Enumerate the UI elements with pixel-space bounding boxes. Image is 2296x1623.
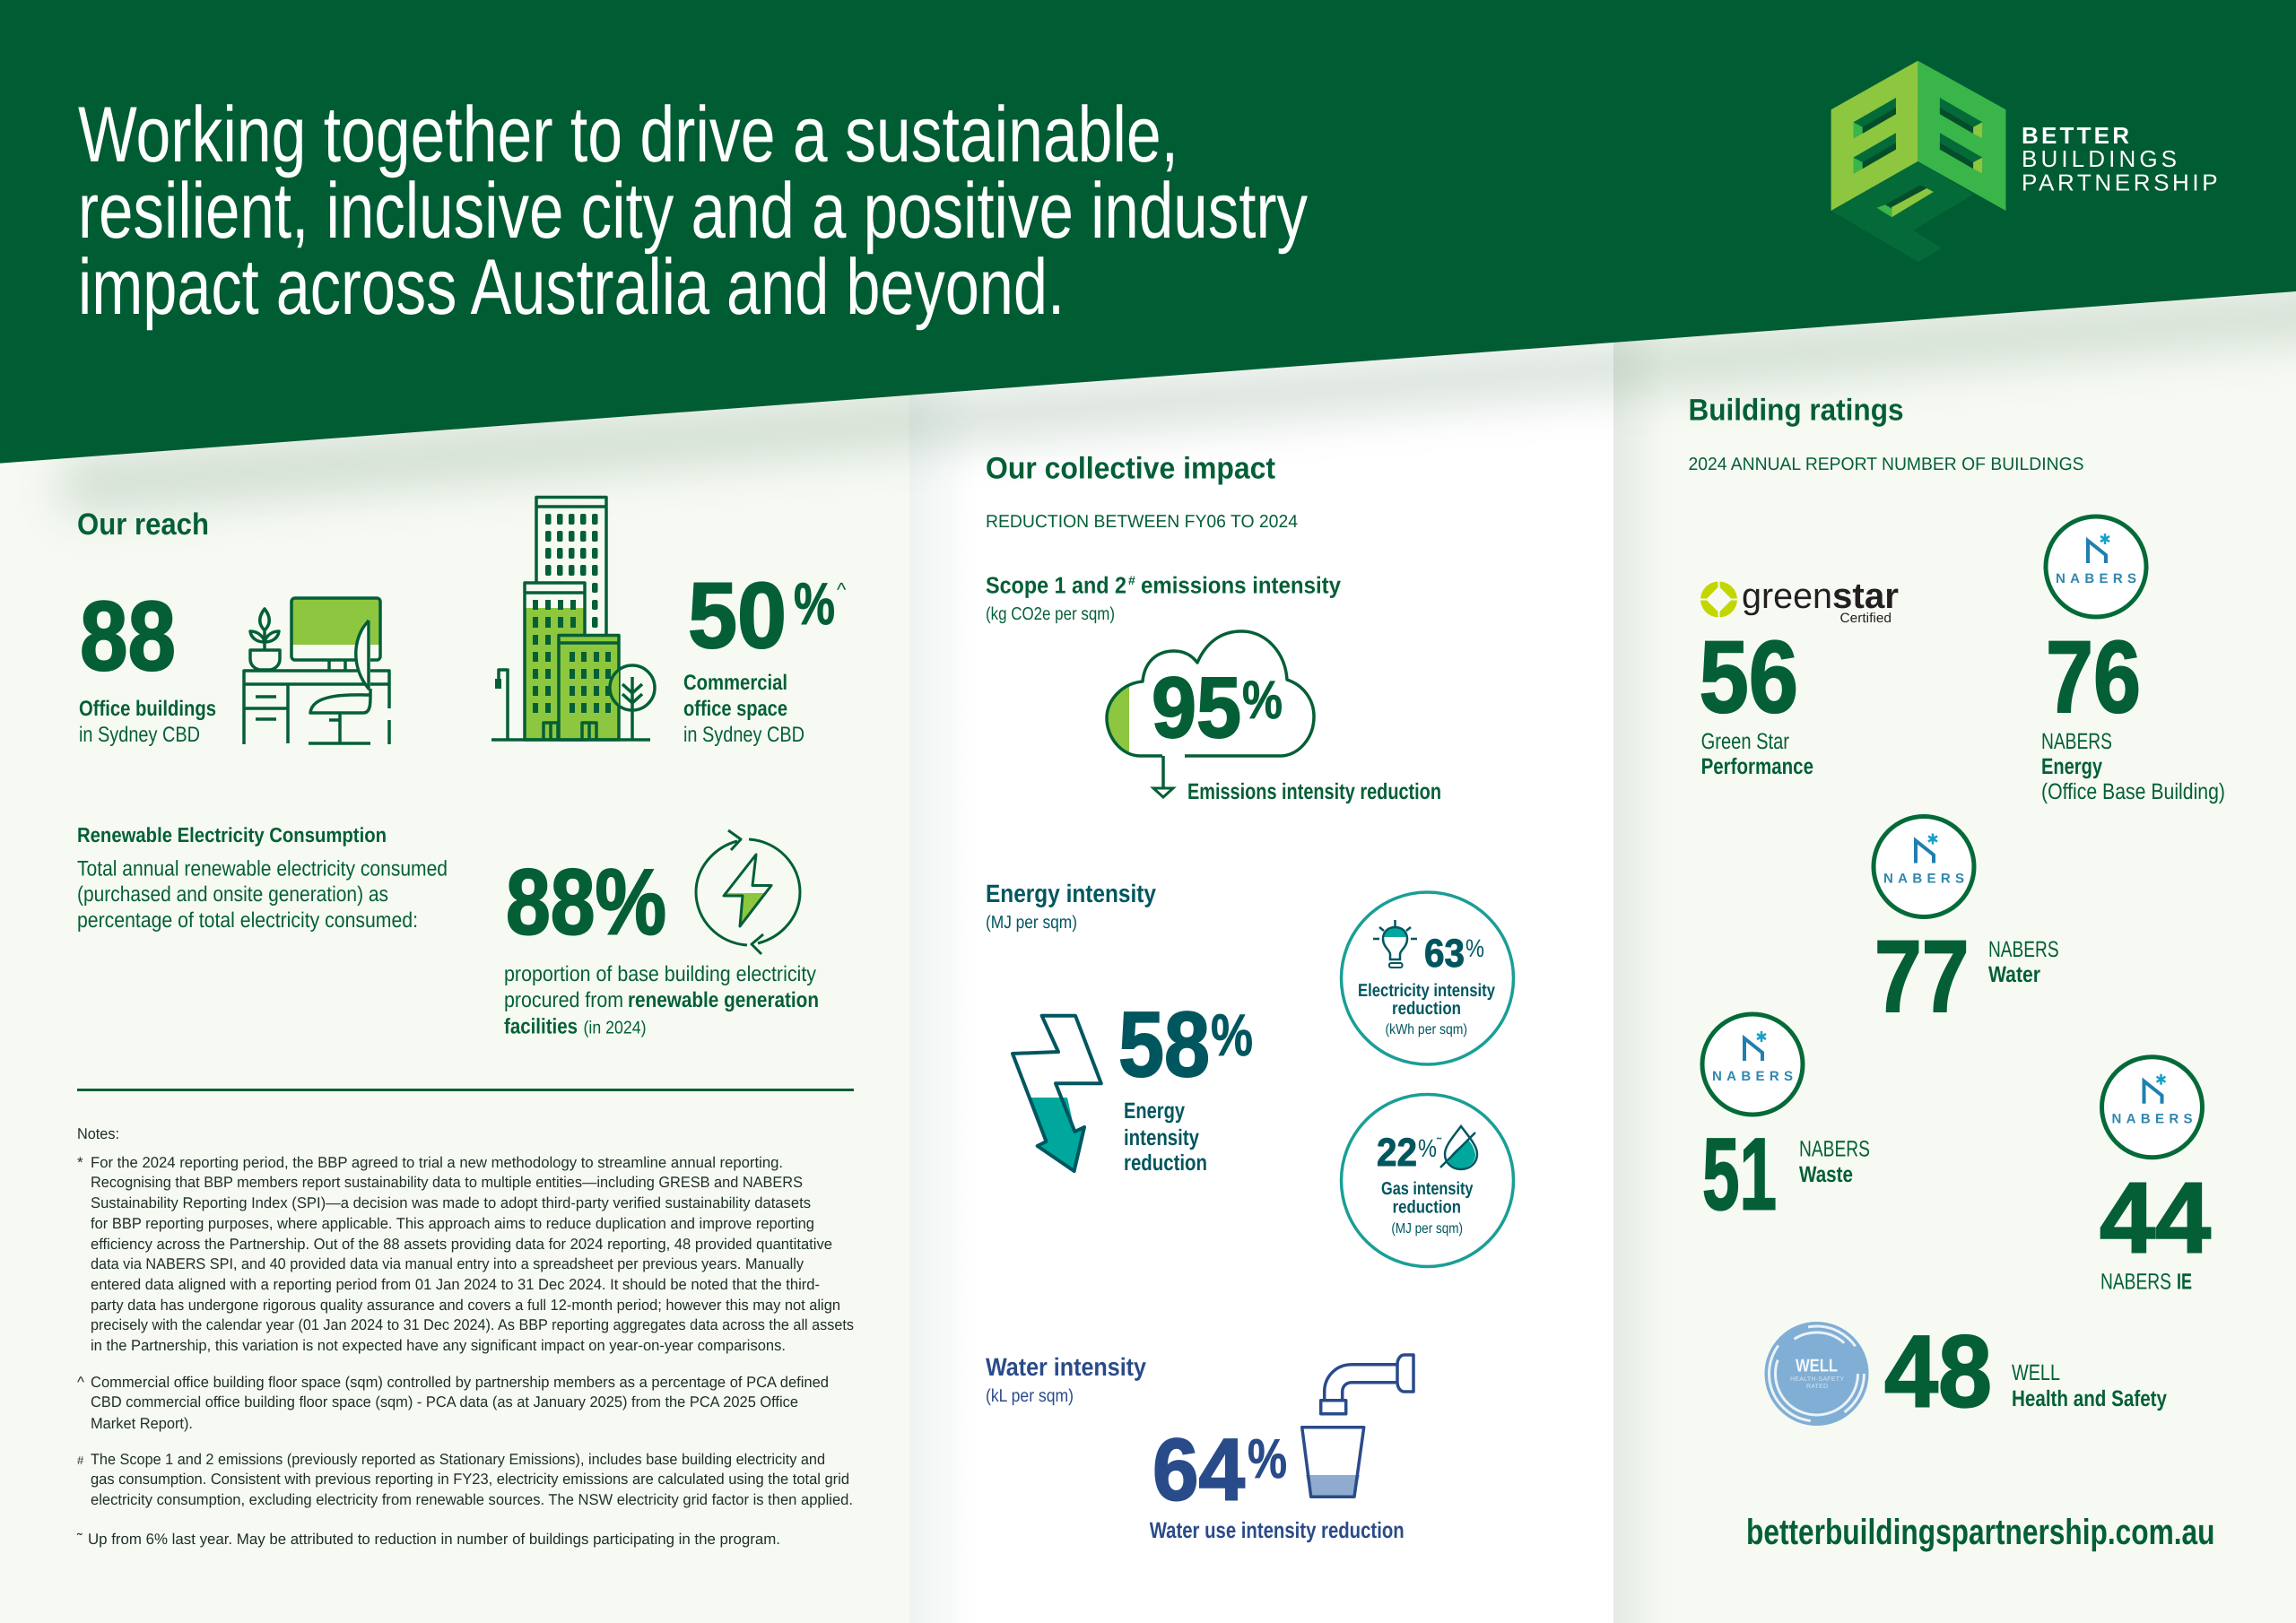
text block: renewable electricity consumption: Total annual renewable electricity consumed (77, 857, 448, 881)
notes: in the Partnership, this variation is not expected have any significant impact on year-on-year comparisons. (91, 1337, 786, 1354)
callout: electricity intensity: 63 (1424, 932, 1465, 976)
heading: energy intensity (986, 880, 1156, 933)
heading: our collective impact (986, 452, 1298, 532)
text block: proportion of renewable generation: (in 2024) (583, 1019, 646, 1038)
title: Working together to drive a sustainable, (78, 90, 1178, 178)
stat: 50% commercial office space: office space (683, 697, 787, 721)
callout: gas intensity: reduction (1393, 1198, 1461, 1218)
notes: Notes: (77, 1125, 119, 1142)
notes: Sustainability Reporting Index (SPI)—a decision was made to adopt third-party verified sustainability datasets (91, 1194, 811, 1211)
heading: scope 1 and 2 emissions: (kg CO2e per sqm) (986, 604, 1115, 624)
stat: 88 office buildings (79, 581, 216, 747)
notes: data via NABERS SPI, and 40 provided data via manual entry into a spreadsheet per previous years. Manually (91, 1255, 804, 1272)
badge: NABERS energy: NABERS (2056, 571, 2136, 586)
callout: electricity intensity (1342, 892, 1514, 1064)
notes: party data has undergone rigorous quality assurance and covers a full 12-month period; however this may not align (91, 1297, 840, 1314)
icon: light bulb (1373, 920, 1417, 968)
stat: 51 NABERS waste (1702, 1117, 1870, 1232)
text block: proportion of renewable generation (504, 962, 819, 1039)
stat: 48 WELL (1884, 1315, 2167, 1429)
callout: electricity intensity: % (1465, 934, 1484, 962)
badge: NABERS water: NABERS (1883, 872, 1964, 886)
stat: 48 WELL: 48 (1884, 1315, 1992, 1429)
logo: greenstar: Certified (1840, 611, 1892, 626)
stat: 88 office buildings: in Sydney CBD (79, 723, 200, 747)
callout: gas intensity: (MJ per sqm) (1391, 1221, 1463, 1237)
heading: Our reach: Our reach (77, 508, 209, 542)
heading: water intensity: (kL per sqm) (986, 1386, 1074, 1406)
logo: Better Buildings Partnership: PARTNERSHIP (2022, 169, 2218, 196)
icon: city buildings (491, 497, 655, 740)
text block: proportion of renewable generation: proportion of base building electricity (504, 962, 816, 986)
icon: tap and glass (1302, 1355, 1413, 1497)
notes: CBD commercial office building floor space (sqm) - PCA data (as at January 2025) from the PCA 2025 Office (91, 1393, 798, 1410)
callout: gas intensity: Gas intensity (1381, 1179, 1474, 1199)
stat: 77 NABERS water (1874, 920, 2059, 1034)
stat: 76 NABERS energy (2041, 621, 2225, 804)
stat: 58% energy: % (1211, 1002, 1253, 1068)
heading: building ratings: 2024 ANNUAL REPORT NUMBER OF BUILDINGS (1688, 455, 2084, 474)
callout: gas intensity (1342, 1094, 1514, 1266)
notes: # (77, 1454, 84, 1467)
stat: 95% emissions: 95 (1152, 660, 1241, 756)
stat: 50% commercial office space: 50 (688, 564, 787, 668)
stat: 50% commercial office space (683, 564, 847, 747)
stat: 56 green star: 56 (1699, 621, 1798, 734)
stat: 77 NABERS water: Water (1988, 962, 2040, 987)
stat: 48 WELL: WELL (2012, 1360, 2060, 1385)
text block: proportion of renewable generation: renewable generation (628, 988, 819, 1012)
text block: proportion of renewable generation: facilities (504, 1015, 578, 1039)
badge: NABERS energy (2046, 516, 2146, 617)
stat: 88 office buildings: 88 (80, 581, 176, 691)
heading: our collective impact: REDUCTION BETWEEN FY06 TO 2024 (986, 512, 1298, 532)
notes: precisely with the calendar year (01 Jan 2024 to 31 Dec 2024). As BBP reporting aggregates data across the all assets (91, 1316, 854, 1333)
callout: electricity intensity: Electricity intensity (1358, 981, 1496, 1001)
stat: 50% commercial office space: ^ (837, 578, 847, 601)
notes: The Scope 1 and 2 emissions (previously reported as Stationary Emissions), includes base building electricity and (91, 1451, 825, 1468)
heading: water intensity (986, 1353, 1146, 1406)
icon: office desk (244, 598, 389, 744)
notes: efficiency across the Partnership. Out of the 88 assets providing data for 2024 reporting, 48 provided quantitative (91, 1236, 832, 1253)
stat: 76 NABERS energy: 76 (2046, 621, 2141, 734)
notes (76, 1125, 854, 1548)
stat: 44 NABERS IE: NABERS (2100, 1270, 2171, 1295)
icon: gas flame (1440, 1126, 1477, 1169)
stat: 50% commercial office space: % (794, 570, 835, 637)
stat: 58% energy: Energy (1124, 1098, 1185, 1124)
notes: Market Report). (91, 1415, 193, 1432)
logo: greenstar (1700, 577, 1899, 626)
callout: electricity intensity: (kWh per sqm) (1385, 1022, 1467, 1037)
stat: 58% energy (1118, 993, 1253, 1176)
stat: 95% emissions: % (1242, 670, 1283, 730)
stat: 64% water (1150, 1420, 1405, 1543)
heading: building ratings (1688, 393, 2084, 474)
stat: 50% commercial office space: Commercial (683, 671, 787, 695)
notes: electricity consumption, excluding electricity from renewable sources. The NSW electricity grid factor is then applied. (91, 1491, 853, 1508)
stat: 44 NABERS IE: 44 (2100, 1162, 2211, 1274)
text block: renewable electricity consumption: percentage of total electricity consumed: (77, 908, 418, 933)
header banner (0, 0, 2296, 464)
badge: WELL health and safety: RATED (1806, 1384, 1828, 1390)
stat: 76 NABERS energy: Energy (2041, 754, 2102, 779)
badge: NABERS IE: NABERS (2111, 1112, 2192, 1127)
logo: greenstar: star (1832, 577, 1899, 616)
notes: for BBP reporting purposes, where applicable. This approach aims to reduce duplication and improve reporting (91, 1215, 814, 1232)
callout: gas intensity: ˜ (1436, 1136, 1442, 1151)
title: resilient, inclusive city and a positive industry (78, 166, 1308, 255)
notes: ^ (77, 1374, 84, 1391)
text block: renewable electricity consumption (77, 823, 448, 933)
stat: 95% emissions: Emissions intensity reduction (1187, 779, 1441, 804)
stat: 56 green star: Performance (1701, 754, 1813, 779)
stat: 64% water: % (1248, 1428, 1287, 1490)
stat: 77 NABERS water: 77 (1874, 920, 1970, 1034)
notes: entered data aligned with a reporting period from 01 Jan 2024 to 31 Dec 2024. It should be noted that the third- (91, 1276, 820, 1293)
badge: NABERS waste (1702, 1014, 1803, 1115)
callout: electricity intensity: reduction (1392, 999, 1461, 1019)
callout: gas intensity: 22 (1377, 1131, 1417, 1175)
heading: scope 1 and 2 emissions: # (1128, 573, 1135, 587)
badge: NABERS IE (2102, 1057, 2203, 1158)
heading: building ratings: Building ratings (1688, 393, 1903, 427)
stat: 51 NABERS waste: NABERS (1799, 1137, 1870, 1162)
heading: water intensity: Water intensity (986, 1353, 1146, 1381)
heading: scope 1 and 2 emissions: emissions intensity (1141, 572, 1341, 599)
icon: renewable energy cycle (696, 830, 800, 954)
notes: For the 2024 reporting period, the BBP agreed to trial a new methodology to streamline annual reporting. (91, 1154, 783, 1171)
stat: 58% energy: reduction (1124, 1150, 1207, 1176)
stat: 51 NABERS waste: 51 (1702, 1117, 1777, 1232)
stat: 76 NABERS energy: (Office Base Building) (2041, 779, 2225, 804)
callout: gas intensity: % (1418, 1134, 1437, 1162)
logo: greenstar: green (1742, 577, 1832, 616)
stat: 44 NABERS IE: IE (2177, 1270, 2192, 1295)
notes: ˜ (76, 1531, 83, 1548)
text block: renewable electricity consumption: Renewable Electricity Consumption (77, 823, 387, 846)
stat: 88% renewable: 88% (506, 850, 666, 954)
title (78, 90, 1308, 331)
heading: energy intensity: (MJ per sqm) (986, 913, 1077, 933)
badge: NABERS waste: NABERS (1712, 1069, 1793, 1084)
badge: WELL health and safety (1765, 1322, 1869, 1426)
stat: 76 NABERS energy: NABERS (2041, 729, 2112, 754)
notes: gas consumption. Consistent with previous reporting in FY23, electricity emissions are calculated using the total grid (91, 1471, 849, 1488)
notes: Up from 6% last year. May be attributed to reduction in number of buildings participating in the program. (88, 1531, 780, 1548)
stat: 48 WELL: Health and Safety (2012, 1386, 2167, 1411)
text block: renewable electricity consumption: (purchased and onsite generation) as (77, 882, 388, 907)
stat: 51 NABERS waste: Waste (1799, 1162, 1853, 1187)
icon: cloud with arrow (1103, 628, 1314, 797)
stat: 77 NABERS water: NABERS (1988, 937, 2059, 962)
heading: our collective impact: Our collective impact (986, 452, 1275, 486)
stat: 64% water: 64 (1152, 1420, 1245, 1519)
badge: NABERS water (1874, 816, 1974, 916)
text block: proportion of renewable generation: procured from (504, 988, 623, 1012)
stat: 88 office buildings: Office buildings (79, 697, 216, 721)
heading: energy intensity: Energy intensity (986, 880, 1156, 907)
logo: Better Buildings Partnership (1831, 61, 2218, 262)
heading: scope 1 and 2 emissions: Scope 1 and 2 (986, 572, 1126, 599)
stat: 58% energy: intensity (1124, 1125, 1199, 1150)
notes: Recognising that BBP members report sustainability data to multiple entities—including GRESB and NABERS (91, 1174, 803, 1191)
stat: 50% commercial office space: in Sydney CBD (683, 723, 804, 747)
stat: 64% water: Water use intensity reduction (1150, 1518, 1405, 1543)
heading: scope 1 and 2 emissions (986, 572, 1341, 624)
logo: Better Buildings Partnership: BETTER (2022, 122, 2129, 149)
badge: WELL health and safety: HEALTH-SAFETY (1790, 1376, 1844, 1383)
notes: * (77, 1154, 83, 1171)
logo: Better Buildings Partnership: BUILDINGS (2022, 145, 2177, 172)
notes: Commercial office building floor space (sqm) controlled by partnership members as a percentage of PCA defined (91, 1374, 829, 1391)
stat: 95% emissions (1152, 660, 1441, 804)
stat: 58% energy: 58 (1118, 993, 1210, 1096)
badge: WELL health and safety: WELL (1796, 1356, 1838, 1376)
title: impact across Australia and beyond. (78, 242, 1065, 331)
stat: 56 green star: Green Star (1701, 729, 1789, 754)
icon: energy lightning arrow (1013, 1016, 1101, 1171)
